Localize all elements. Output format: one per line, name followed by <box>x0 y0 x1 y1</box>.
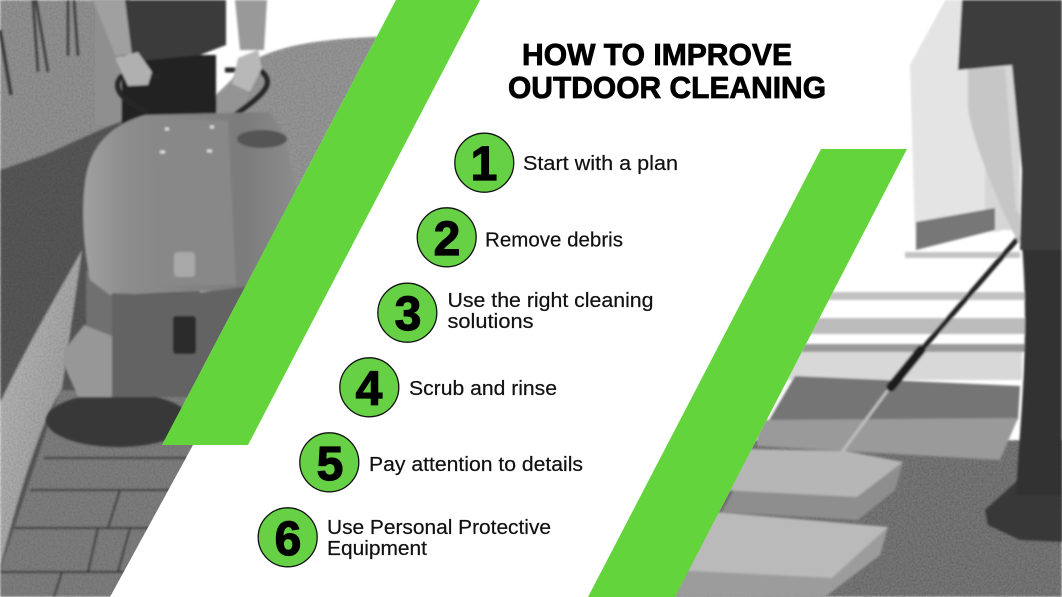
right sleeve <box>235 0 267 50</box>
right ground <box>675 438 1062 597</box>
hood centre panel <box>214 121 235 284</box>
step 4 <box>340 358 557 417</box>
stone top <box>670 511 888 578</box>
number 3: 3 <box>395 288 421 341</box>
brick joints <box>0 458 190 597</box>
machine base <box>64 325 112 397</box>
wand grip <box>891 350 921 387</box>
upper lawn <box>0 0 130 170</box>
badge 5 <box>300 433 359 492</box>
brick pavement <box>0 390 200 597</box>
step 6: Equipment <box>327 538 427 560</box>
number 2: 2 <box>434 213 460 266</box>
hood recess <box>237 130 287 148</box>
step 1 <box>455 133 678 192</box>
stone side <box>722 462 903 520</box>
sweeper machine <box>64 112 296 397</box>
label 3: Use the right cleaning <box>448 290 654 312</box>
title line 1: HOW TO IMPROVE <box>522 37 792 72</box>
stepping stone 2 <box>660 511 888 597</box>
label 1: Start with a plan <box>523 153 678 175</box>
stone side <box>660 527 888 597</box>
number 1: 1 <box>471 138 497 191</box>
hood studs <box>160 127 214 152</box>
dark lawn <box>50 120 123 153</box>
step 2 <box>417 208 623 267</box>
left sleeve <box>93 0 132 55</box>
shoe <box>985 480 1062 542</box>
number 4: 4 <box>356 363 383 416</box>
light steps <box>825 292 1030 300</box>
green diagonal band right <box>588 149 907 597</box>
label 2: Remove debris <box>485 230 623 252</box>
title <box>508 37 826 105</box>
paved path <box>200 36 400 300</box>
shirt <box>958 0 1062 250</box>
worker <box>958 0 1062 542</box>
wand <box>891 236 1020 387</box>
logo <box>174 252 195 277</box>
title line 2: OUTDOOR CLEANING <box>508 70 826 105</box>
label 5: Pay attention to details <box>369 454 583 476</box>
stepping stone 1 <box>720 449 903 520</box>
wand shaft <box>918 236 1020 354</box>
label 4: Scrub and rinse <box>409 378 557 400</box>
brush shadow <box>46 393 190 447</box>
badge 4 <box>340 358 399 417</box>
wall <box>910 0 1000 232</box>
spray <box>842 390 888 452</box>
number 6: 6 <box>275 513 301 566</box>
scene <box>660 0 1062 597</box>
green diagonal band left <box>162 0 480 445</box>
vest <box>123 0 226 62</box>
wall shade <box>985 60 1020 230</box>
number 5: 5 <box>317 438 343 491</box>
stone top <box>720 449 903 497</box>
badge 1 <box>455 133 514 192</box>
badge 6 <box>258 508 317 567</box>
step 6 <box>258 508 551 567</box>
large wet slab <box>768 376 1020 422</box>
operator <box>93 0 268 125</box>
kerb <box>0 250 82 567</box>
legs <box>1016 245 1062 495</box>
right hand <box>232 50 262 92</box>
front panel <box>112 284 260 397</box>
trees <box>0 0 78 95</box>
label 6: Use Personal Protective <box>327 517 551 539</box>
gravel texture <box>660 440 1062 597</box>
machine and operator <box>46 0 296 447</box>
trousers <box>122 55 216 125</box>
ground <box>0 0 400 597</box>
gravel <box>660 440 1062 597</box>
step 3: solutions <box>448 311 534 333</box>
step 5 <box>300 433 583 492</box>
mid step shade <box>795 318 1030 334</box>
badge 3 <box>378 283 437 342</box>
left photo: operator with floor sweeper <box>0 0 400 597</box>
upper step <box>905 252 1020 258</box>
right photo: worker with pressure washer <box>660 0 1062 597</box>
left hand <box>115 52 152 86</box>
lower body <box>86 270 112 340</box>
background <box>756 439 1020 442</box>
step 3 <box>378 283 654 342</box>
pedal <box>173 316 196 354</box>
step riser <box>780 352 1022 380</box>
slab front <box>757 418 1018 460</box>
ground base <box>0 154 201 570</box>
top ledge <box>916 208 995 250</box>
machine hood <box>83 112 296 295</box>
handle <box>118 70 268 115</box>
badge 2 <box>417 208 476 267</box>
arm <box>968 68 1020 245</box>
wet step <box>790 344 1025 352</box>
ground texture <box>0 0 400 597</box>
